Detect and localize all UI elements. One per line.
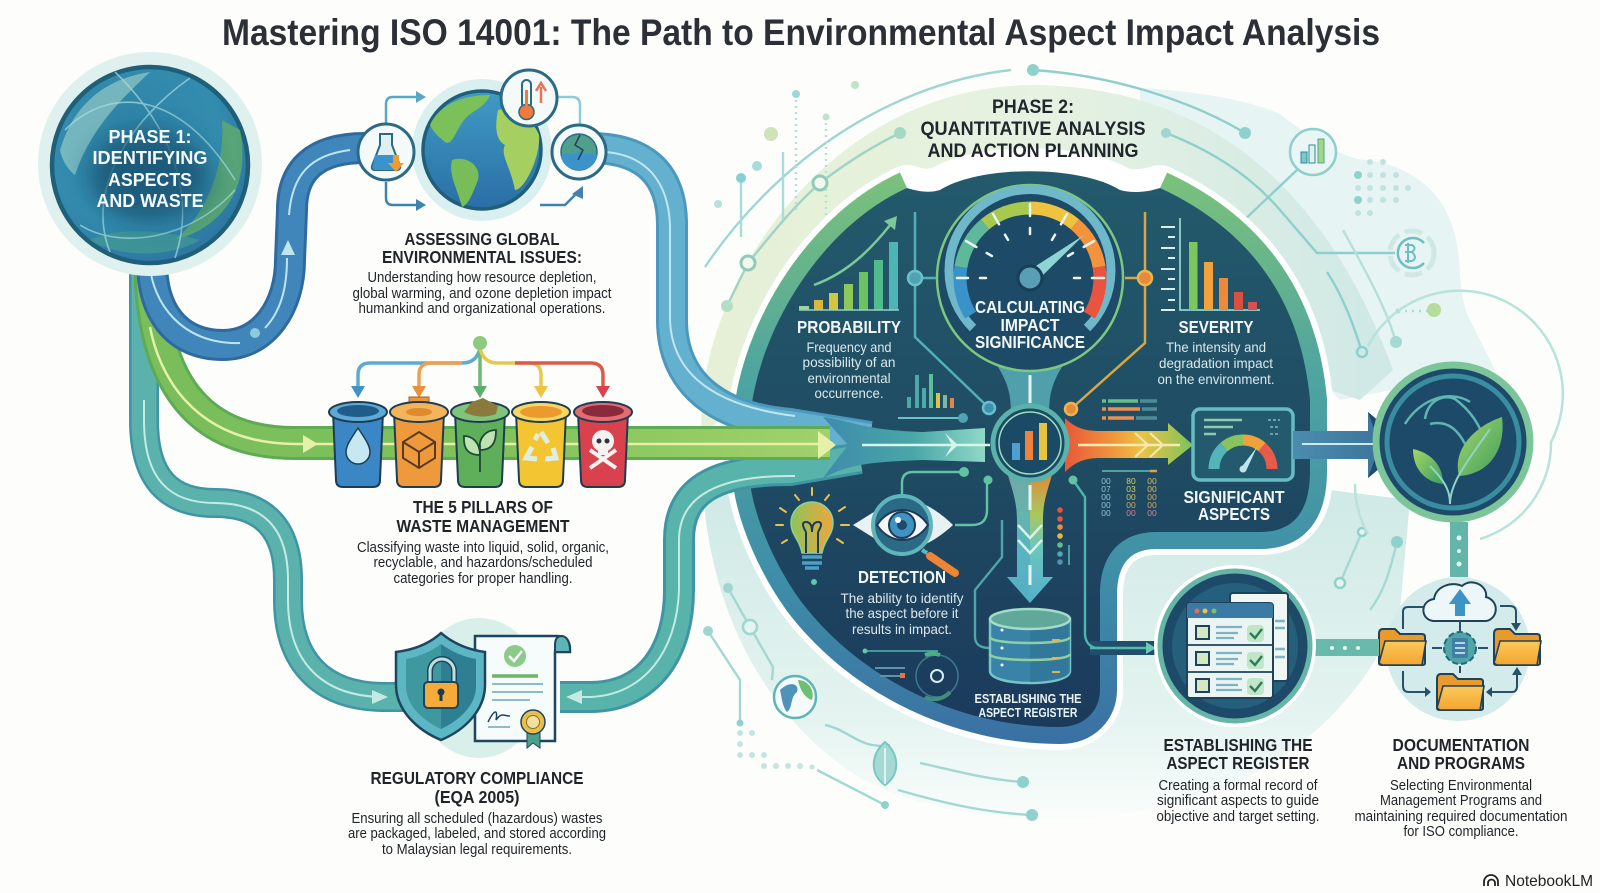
heading: phase 2: [920, 96, 1146, 162]
text: 5 pillars: WASTE MANAGEMENT: [396, 516, 570, 536]
icon: shield with padlock: [396, 633, 485, 740]
hub: analysis centre: [993, 406, 1067, 480]
text: phase 1 label: ASPECTS: [108, 169, 192, 190]
icon: small earth: [774, 676, 816, 718]
icon: folder bottom: [1437, 674, 1484, 710]
heading: phase 2: PHASE 2:: [992, 96, 1074, 118]
text: register caption inside panel: [974, 692, 1082, 720]
number matrix decoration: 00: [1147, 492, 1157, 502]
text: 5 pillars: THE 5 PILLARS OF: [413, 497, 553, 517]
register circle: [1154, 565, 1316, 727]
gauge label: CALCULATING: [975, 297, 1085, 317]
phase 1 globe: [38, 52, 262, 276]
icon: earth: [423, 91, 541, 209]
text: assessing global issues: Understanding how resource depletion,: [368, 270, 596, 286]
connectors inside panel: [908, 212, 1152, 415]
text: detection: [840, 567, 964, 637]
icon: flask badge: [358, 124, 414, 180]
flow: light blue path from global issues to phase 2: [590, 148, 870, 437]
number matrix decoration: 00: [1126, 492, 1136, 502]
text: severity: SEVERITY: [1178, 317, 1254, 337]
text: documentation and programs: maintaining required documentation: [1354, 809, 1568, 825]
icon: coin badge: [1390, 231, 1434, 275]
flow: teal path from regulatory compliance to phase 2: [560, 458, 860, 704]
text: 5 pillars: Classifying waste into liquid, solid, organic,: [357, 540, 609, 556]
arrow: significant aspects to outcome: [1293, 412, 1407, 478]
text: regulatory compliance: [348, 768, 606, 858]
text: establishing the aspect register: [1156, 735, 1320, 825]
icon: organic bin: [451, 398, 509, 487]
flow: green waste path: [150, 262, 836, 459]
icon: recyclable bin: [512, 402, 570, 487]
text: severity: degradation impact: [1159, 355, 1273, 371]
text: probability: Frequency and: [806, 339, 892, 355]
number matrix decoration: 03: [1126, 484, 1136, 494]
significant aspects monitor: [1193, 409, 1293, 480]
text: severity: [1158, 317, 1274, 387]
text: assessing global issues: ENVIRONMENTAL ISSUES:: [382, 247, 582, 267]
number matrix decoration: 00: [1147, 476, 1157, 486]
text: probability: [797, 317, 901, 401]
text: establishing the aspect register: ESTABLISHING THE: [1164, 735, 1312, 755]
connector: register to documentation: [1307, 639, 1379, 656]
text: phase 1 label: PHASE 1:: [108, 126, 192, 147]
text: significant aspects: ASPECTS: [1198, 504, 1270, 524]
logo: NotebookLM: NotebookLM: [1505, 873, 1593, 890]
panel-internal wiring: [902, 467, 1098, 648]
decorative nodes: [703, 64, 1441, 821]
outcome circle: leaves and globe: [1355, 291, 1563, 539]
icon: light bulb: [776, 488, 849, 585]
main checklist card: [1187, 603, 1273, 698]
number matrix decoration: 00: [1101, 508, 1111, 518]
number matrix decoration: 00: [1101, 476, 1111, 486]
text: detection: The ability to identify: [840, 590, 964, 606]
text: regulatory compliance: Ensuring all scheduled (hazardous) wastes: [352, 811, 602, 827]
text: severity: on the environment.: [1158, 371, 1274, 387]
number matrix decoration: 00: [1101, 500, 1111, 510]
icon: folder right: [1494, 629, 1541, 665]
heading: phase 2: AND ACTION PLANNING: [928, 140, 1138, 162]
flow: converging band into hub: [823, 417, 990, 478]
text: severity: The intensity and: [1166, 339, 1266, 355]
text: assessing global issues: ASSESSING GLOBAL: [404, 229, 560, 249]
icon group: earth and issue badges: [358, 70, 606, 221]
text: probability: occurrence.: [814, 385, 884, 401]
gauge body: [937, 185, 1123, 371]
flow: teal path to regulatory compliance: [144, 262, 410, 704]
text: assessing global issues: global warming, and ozone depletion impact: [352, 286, 612, 302]
text: regulatory compliance: (EQA 2005): [434, 787, 520, 807]
number matrix decoration: 00: [1101, 492, 1111, 502]
heading: phase 2: QUANTITATIVE ANALYSIS: [920, 118, 1146, 140]
text: phase 1 label: AND WASTE: [96, 190, 204, 211]
icon: gear: [1444, 632, 1476, 664]
status dots: [1057, 507, 1069, 565]
arrow: hub down to register: [1006, 468, 1054, 603]
text: regulatory compliance: are packaged, labeled, and stored according: [348, 826, 606, 842]
gauge stem: [990, 355, 1070, 425]
radar decoration: [862, 648, 958, 699]
text: establishing the aspect register: ASPECT REGISTER: [1166, 753, 1310, 773]
text: assessing global issues: [352, 229, 612, 317]
chart: probability bars: [799, 216, 899, 310]
small arrows: [386, 97, 580, 205]
text: significant aspects: [1184, 487, 1285, 524]
flow: blue path into global issues: [150, 148, 365, 345]
text: documentation and programs: AND PROGRAMS: [1397, 753, 1525, 773]
panel: phase 2 dark analysis panel: [750, 171, 1310, 727]
text: assessing global issues: humankind and organizational operations.: [358, 301, 606, 317]
icon: ozone badge: [552, 125, 606, 179]
text: register caption inside panel: ESTABLISHING THE: [974, 692, 1082, 706]
text: probability: PROBABILITY: [797, 317, 901, 337]
number matrix decoration: [1101, 476, 1157, 518]
icon: folder left: [1379, 629, 1426, 665]
text: 5 pillars: [357, 497, 609, 587]
text: phase 1 label: [92, 126, 208, 211]
text: 5 pillars: categories for proper handling.: [394, 571, 572, 587]
text: regulatory compliance: to Malaysian legal requirements.: [382, 842, 572, 858]
text: documentation and programs: Management Programs and: [1380, 793, 1542, 809]
documentation circle: [1379, 577, 1541, 721]
title: Mastering ISO 14001: The Path to Environmental Aspect Impact Analysis: [222, 11, 1380, 53]
text: phase 1 label: IDENTIFYING: [92, 147, 208, 168]
text: documentation and programs: for ISO compliance.: [1404, 824, 1518, 840]
number matrix decoration: 00: [1147, 500, 1157, 510]
icon: liquid bin: [329, 402, 387, 487]
text: documentation and programs: [1354, 735, 1568, 840]
number matrix decoration: 00: [1126, 500, 1136, 510]
arrow: hub to significant aspects: [1065, 418, 1193, 472]
icon: thermometer badge: [501, 70, 557, 126]
text: establishing the aspect register: Creating a formal record of: [1158, 778, 1318, 794]
icon: solid bin: [390, 397, 448, 487]
icon: cloud upload: [1423, 582, 1496, 621]
text: significant aspects: SIGNIFICANT: [1184, 487, 1285, 507]
decorative circuit lines around phase 2: [705, 70, 1428, 815]
icon: eye with magnifier: [853, 496, 955, 573]
number matrix decoration: 80: [1126, 476, 1136, 486]
chart: severity bars: [1161, 218, 1260, 310]
text: establishing the aspect register: objective and target setting.: [1156, 809, 1320, 825]
number matrix decoration: 00: [1126, 508, 1136, 518]
icon group: shield and certificate: [396, 618, 570, 758]
number matrix decoration: 00: [1147, 508, 1157, 518]
icon: small leaf: [874, 742, 896, 785]
connector: outcome to documentation: [1450, 522, 1468, 577]
connector: panel to register: [1090, 641, 1162, 655]
text: probability: possibility of an: [802, 354, 896, 370]
icon: certificate: [475, 636, 570, 748]
text: probability: environmental: [808, 370, 890, 386]
small indicator lines: [1102, 401, 1157, 471]
gauge label: IMPACT: [1000, 315, 1060, 335]
back card: [1230, 593, 1288, 681]
icon: hazardous bin: [574, 402, 632, 487]
gauge label: SIGNIFICANCE: [975, 332, 1085, 352]
number matrix decoration: 07: [1101, 484, 1111, 494]
text: register caption inside panel: ASPECT REGISTER: [978, 706, 1078, 720]
text: establishing the aspect register: significant aspects to guide: [1157, 793, 1319, 809]
gauge label: [975, 297, 1085, 352]
icon: small chart badge: [1290, 129, 1336, 175]
text: detection: results in impact.: [852, 621, 952, 637]
phase 2 pale backdrop: [701, 85, 1495, 820]
text: detection: the aspect before it: [846, 605, 959, 621]
icon: database: [990, 609, 1070, 683]
text: documentation and programs: Selecting Environmental: [1390, 778, 1532, 794]
icon: branching arrows to bins: [351, 336, 610, 398]
gauge: calculating impact significance: [937, 185, 1123, 425]
text: documentation and programs: DOCUMENTATION: [1392, 735, 1530, 755]
text: 5 pillars: recyclable, and hazardons/scheduled: [374, 555, 592, 571]
chart: small bars: [898, 374, 968, 423]
text: regulatory compliance: REGULATORY COMPLIANCE: [370, 768, 584, 788]
number matrix decoration: 00: [1147, 484, 1157, 494]
text: detection: DETECTION: [858, 567, 946, 587]
